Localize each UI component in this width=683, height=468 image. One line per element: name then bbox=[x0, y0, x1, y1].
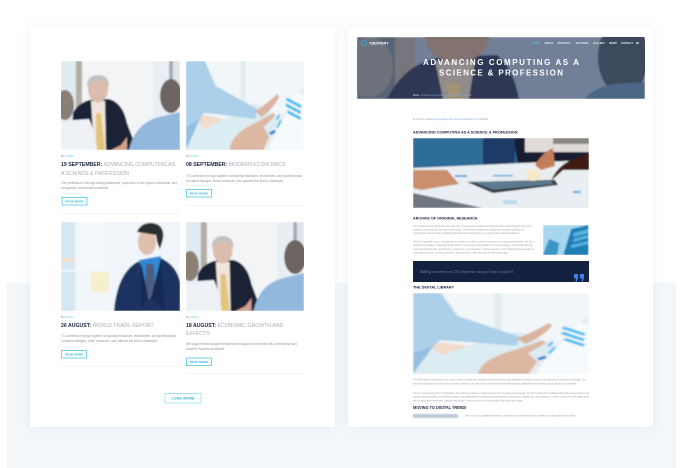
background band bbox=[7, 283, 676, 468]
button: read more bbox=[186, 358, 212, 366]
button: load more bbox=[165, 394, 201, 403]
article title: 26 AUGUST: WORLD TRADE REPORT bbox=[61, 323, 155, 329]
photo: man in blue suit bbox=[61, 222, 180, 311]
heading: article title: ADVANCING COMPUTING AS A SCIENCE & PROFESSION bbox=[413, 130, 518, 134]
article title: EFFECTS bbox=[186, 331, 210, 337]
button: read more: READ MORE bbox=[65, 352, 83, 356]
button: read more bbox=[62, 198, 87, 205]
text block: archive paragraphs: computing professionals, practitioners, researchers, and educators. It offers a window on the digital world with access to bbox=[413, 247, 534, 251]
article card: 08 September: By Admin bbox=[186, 154, 199, 158]
article title: A SCIENCE & PROFESSION bbox=[61, 171, 129, 177]
article title: 08 SEPTEMBER: MODERN ECONOMICS bbox=[186, 162, 286, 168]
navigation: SECTIONS bbox=[576, 42, 589, 45]
article summary bbox=[186, 342, 297, 351]
article card: 26 August bbox=[61, 222, 180, 367]
navigation: HOME bbox=[532, 42, 540, 45]
article card: 18 August bbox=[181, 222, 306, 374]
navigation: ABOUT bbox=[545, 42, 554, 45]
quote banner bbox=[413, 261, 589, 282]
navigation: NEWS bbox=[609, 42, 617, 45]
photo: hands on tablet bbox=[413, 293, 589, 374]
text block: library paragraphs: sharing, interoperability, new research design, and collaboration for computing professionals, practitioners, researchers, and educators. It offers a window on the digital world bbox=[413, 395, 589, 399]
article card: 08 September bbox=[186, 61, 304, 206]
photo: desk with tablet bbox=[413, 138, 589, 208]
navigation: GALLERY bbox=[593, 42, 605, 45]
hero banner bbox=[345, 7, 648, 99]
panel: article detail page bbox=[345, 7, 653, 427]
article summary: We support Brown-based infrastructure supports more than 800 professional and bbox=[186, 342, 297, 346]
navigation: STRATEGY bbox=[557, 42, 571, 45]
button: read more: READ MORE bbox=[65, 199, 84, 203]
navigation: CONTACT bbox=[621, 42, 633, 45]
article summary: T3 Conference brings together computing educators, researchers, and professionals bbox=[61, 334, 176, 338]
article summary: The profession's through strong leadership, promotion of the highest standards, and bbox=[61, 181, 177, 185]
button: read more bbox=[186, 190, 212, 197]
navigation: EN bbox=[636, 42, 639, 45]
article card: 26 August: By Admin bbox=[61, 315, 74, 319]
article summary bbox=[61, 181, 177, 190]
article card: 18 August: By Admin bbox=[186, 315, 199, 319]
article summary: T3 Conference brings together computing educators, researchers, and professionals bbox=[186, 174, 302, 178]
text block: archive paragraphs bbox=[413, 224, 535, 255]
article summary bbox=[186, 174, 302, 183]
text block: library paragraphs: The DLs integrated Forums, Scholarship, and content constitute a critical resource for computing professionals. The DL is designed to facilitate information dissemination and bbox=[413, 391, 589, 395]
hero title: SCIENCE & PROFESSION bbox=[439, 68, 563, 78]
button: read more: READ MORE bbox=[190, 360, 208, 364]
text block: closing line: We aim to bring together researchers, scientists, engineers and industry leaders to exchange and share ideas bbox=[466, 413, 576, 417]
article title: 19 SEPTEMBER: bbox=[61, 162, 102, 168]
navigation bbox=[532, 42, 639, 45]
text block: library paragraphs: The ACM Digital Library (DL) is the world's most comprehensive database of full-text articles and bibliographic literature covering computing and information technology. The bbox=[413, 378, 586, 382]
text block: library paragraphs: with access and resources - groups and email - that continue to help with both the information age. bbox=[413, 398, 523, 402]
photo: hands on tablet bbox=[186, 61, 304, 150]
text block: archive paragraphs: covering computing and information technology. This extensive repository includes the complete collection of bbox=[413, 227, 524, 231]
image strip bbox=[413, 414, 458, 418]
quote banner: Adding a memory on T3 Conference using a loop is and feel bbox=[419, 269, 514, 274]
heading: archive: ARCHIVE OF ORIGINAL RESEARCH bbox=[413, 216, 478, 220]
hero photo bbox=[357, 37, 645, 99]
hero title: ADVANCING COMPUTING AS A bbox=[423, 58, 579, 67]
photo: office buildings bbox=[543, 225, 588, 255]
icon: quote marks bbox=[574, 274, 584, 282]
text block: archive paragraphs: The Full Digital Library links with entire with more comprehensive database of technical articles and bibliographic text-terms bbox=[413, 224, 533, 228]
text block: archive paragraphs: news and resources - groups and email - that continue to help with both the information age. bbox=[413, 251, 508, 255]
article summary: to inspire dialogue, share resources, and address the field's challenges. bbox=[186, 179, 284, 183]
article summary bbox=[61, 334, 176, 343]
article title: ECONOMIC GROWTH AND bbox=[216, 323, 283, 329]
heading: moving to digital trend: MOVING TO DIGITAL TREND! bbox=[413, 405, 466, 410]
button: read more: READ MORE bbox=[190, 191, 208, 195]
article card: 19 September bbox=[56, 61, 182, 214]
button: load more: LOAD MORE bbox=[171, 397, 195, 401]
heading: digital library: THE DIGITAL LIBRARY bbox=[413, 286, 454, 290]
logo: T3EXPERT bbox=[369, 42, 389, 46]
article meta: By Admin | Advancing Computing as a Science Profession | 19.09.2020 bbox=[413, 117, 488, 121]
photo: man in meeting bbox=[181, 222, 306, 311]
article summary: student chapters worldwide. bbox=[186, 347, 225, 351]
text block: archive paragraphs: published text and an enhanced bibliographic database of everything in computing from a listed specification. bbox=[413, 231, 520, 235]
article title: 18 AUGUST: bbox=[186, 323, 216, 329]
hero title bbox=[423, 58, 579, 78]
photo: man in meeting bbox=[56, 61, 182, 150]
logo bbox=[362, 40, 389, 46]
text block: archive paragraphs: designed to facilitate professional dissemination on fostering, independability, and acknowledge, and collaboration for bbox=[413, 243, 533, 247]
article summary: recognition of technical excellence. bbox=[61, 186, 109, 190]
article card: 19 September: By Admin bbox=[61, 154, 74, 158]
panel: blog listing page bbox=[30, 27, 335, 427]
article title: ADVANCING COMPUTING AS bbox=[102, 162, 176, 168]
article summary: to inspire dialogue, share resources, and address the field's challenges. bbox=[61, 339, 158, 343]
text block: archive paragraphs: The DLs integrated Forums, Scholarship, and content constitute a critical resource for computing professionals. The DL is bbox=[413, 240, 535, 244]
text block: library paragraphs bbox=[413, 378, 589, 402]
button: read more bbox=[62, 350, 86, 358]
breadcrumb: Home > Advancing Computing as a Science & Profession bbox=[413, 93, 472, 97]
text block: library paragraphs: extensive repository includes the complete collection of publications and an enhanced bibliographic database of everything computing from a publisher. bbox=[413, 381, 577, 385]
